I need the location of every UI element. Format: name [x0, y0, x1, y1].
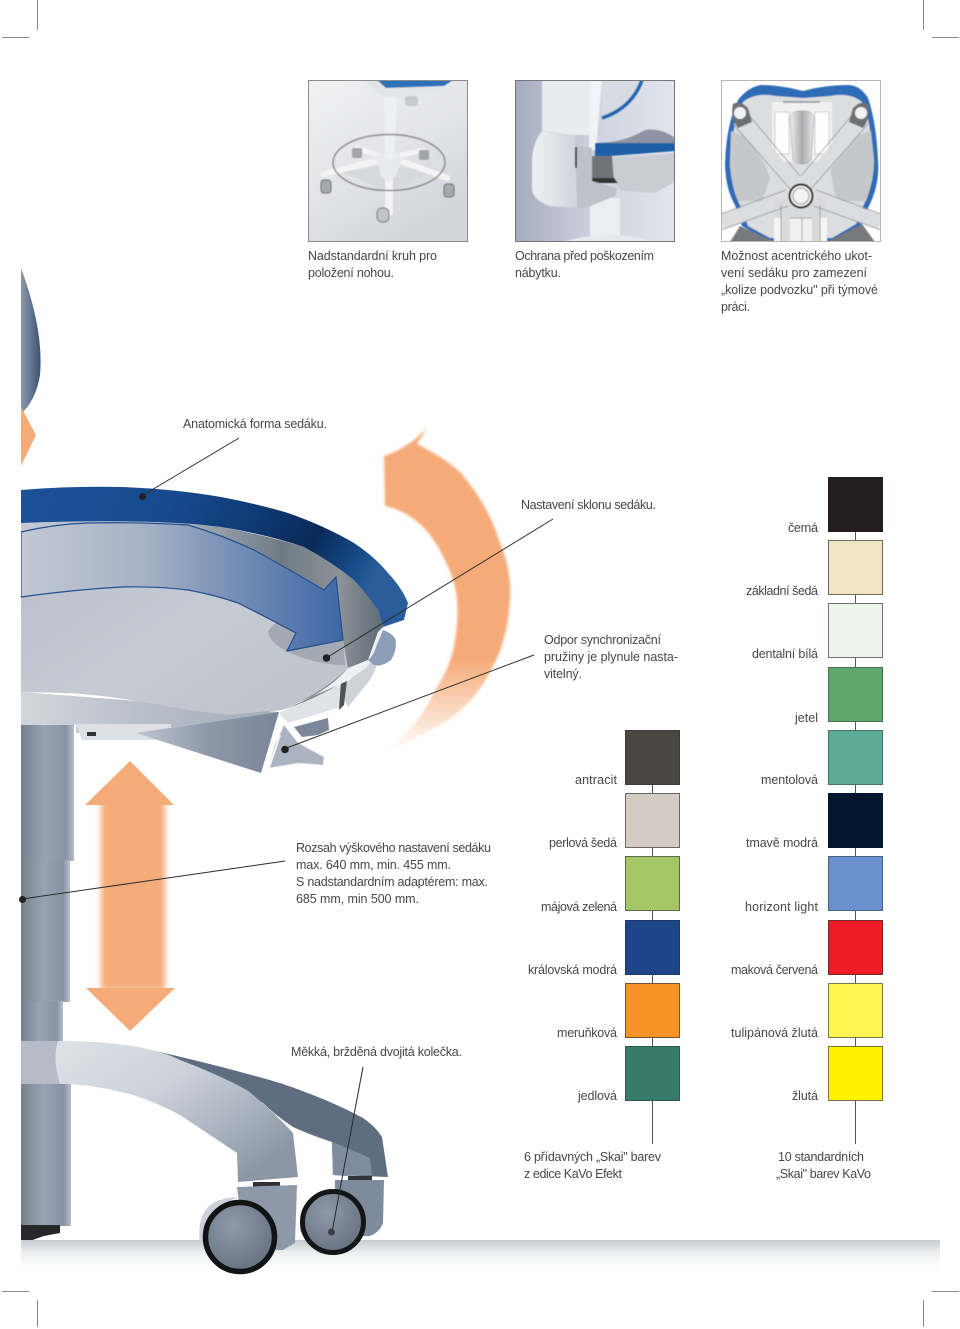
- swatch column: additional colours: [528, 730, 680, 1144]
- caption: furniture protection: Ochrana před poškozením: [515, 249, 654, 263]
- swatch column: standard colours: tulipánová žlutá: [731, 1026, 818, 1040]
- back leg: [127, 1045, 388, 1177]
- label: seat shape: Anatomická forma sedáku.: [183, 417, 327, 431]
- caption: furniture protection: [515, 249, 654, 280]
- blue flow arrow: [21, 523, 343, 651]
- front leg: [21, 1041, 298, 1182]
- label: spring resistance: vitelný.: [544, 667, 582, 681]
- swatch column: additional colours: meruňková: [557, 1026, 617, 1040]
- caption: foot ring: položení nohou.: [308, 266, 394, 280]
- swatch column: additional colours: perlová šedá: [549, 836, 617, 850]
- curved tilt arrow: [384, 428, 510, 749]
- caption: standard colours: 10 standardních: [778, 1150, 864, 1164]
- swatch column: additional colours: královská modrá: [528, 963, 617, 977]
- label: height range: [296, 841, 491, 906]
- caption: furniture protection: nábytku.: [515, 266, 561, 280]
- chair illustration: [21, 487, 940, 1272]
- swatch column: standard colours: žlutá: [792, 1089, 818, 1103]
- swatch column: additional colours: májová zelená: [541, 900, 617, 914]
- swatch column: standard colours: maková červená: [731, 963, 818, 977]
- caption: acentric mounting: vení sedáku pro zamezení: [721, 266, 868, 280]
- swatch column: standard colours: jetel: [794, 711, 818, 725]
- label: casters: Měkká, bržděná dvojitá kolečka.: [291, 1045, 462, 1059]
- photo: furniture protection: [515, 80, 675, 242]
- swatch column: additional colours: antracit: [575, 773, 618, 787]
- front caster: [199, 1182, 297, 1272]
- swatch column: standard colours: základní šedá: [746, 584, 818, 598]
- caption: foot ring: Nadstandardní kruh pro: [308, 249, 437, 263]
- seat underside mechanism: [21, 662, 376, 773]
- photo: foot ring: [308, 80, 468, 242]
- caption: acentric mounting: [721, 249, 878, 314]
- floor shadow: [21, 1240, 940, 1262]
- leader lines with dots: [19, 438, 553, 1236]
- adjustment knob: [368, 630, 396, 665]
- label: height range: S nadstandardním adaptérem: max.: [296, 875, 488, 889]
- swatch column: standard colours: mentolová: [761, 773, 818, 787]
- column: [21, 722, 74, 1244]
- label: spring resistance: [544, 633, 678, 681]
- swatch column: standard colours: tmavě modrá: [746, 836, 818, 850]
- caption: acentric mounting: práci.: [721, 300, 750, 314]
- label: spring resistance: Odpor synchronizační: [544, 633, 662, 647]
- label: seat tilt: Nastavení sklonu sedáku.: [521, 498, 656, 512]
- caption: standard colours: [776, 1150, 871, 1181]
- seat shell: [21, 521, 383, 715]
- swatch column: additional colours: jedlová: [577, 1089, 617, 1103]
- chair backrest fragment and arrow: [21, 268, 41, 466]
- caption: foot ring: [308, 249, 437, 280]
- seat rim: [21, 487, 408, 627]
- caption: acentric mounting: Možnost acentrického ukot-: [721, 249, 872, 263]
- caption: additional colours: 6 přídavných „Skai" barev: [524, 1150, 662, 1164]
- swatch column: standard colours: horizont light: [745, 900, 819, 914]
- caption: additional colours: z edice KaVo Efekt: [524, 1167, 623, 1181]
- label: spring resistance: pružiny je plynule nasta-: [544, 650, 678, 664]
- swatch column: standard colours: černá: [788, 521, 818, 535]
- caption: acentric mounting: „kolize podvozku" při týmové: [721, 283, 878, 297]
- label: height range: max. 640 mm, min. 455 mm.: [296, 858, 451, 872]
- vertical height arrow: [85, 761, 175, 1031]
- caption: additional colours: [524, 1150, 662, 1181]
- caption: standard colours: „Skai" barev KaVo: [776, 1167, 871, 1181]
- photo: acentric seat mounting: [721, 80, 881, 242]
- label: height range: Rozsah výškového nastavení sedáku: [296, 841, 491, 855]
- label: height range: 685 mm, min 500 mm.: [296, 892, 419, 906]
- swatch column: standard colours: dentalní bílá: [752, 647, 818, 661]
- swatch column: standard colours: [731, 477, 882, 1144]
- back caster: [300, 1176, 384, 1252]
